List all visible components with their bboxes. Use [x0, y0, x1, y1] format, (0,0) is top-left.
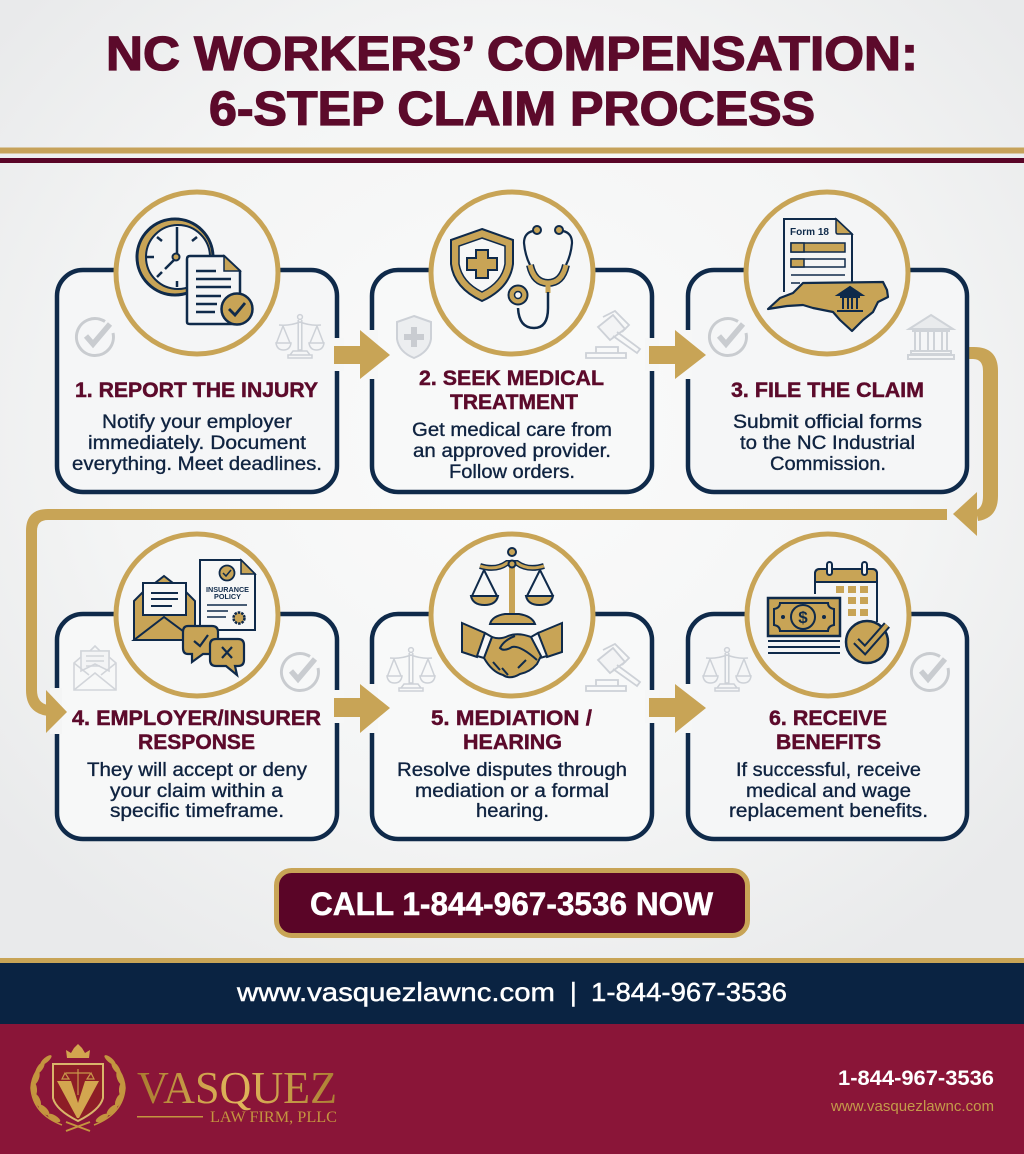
step 4 heading: 4. EMPLOYER/INSURER — [72, 707, 321, 730]
panel: step 5 — [372, 534, 652, 839]
title: 6-STEP CLAIM PROCESS — [209, 83, 815, 136]
connector gap on step 4 card — [50, 688, 62, 734]
navy contact band — [0, 958, 1024, 1024]
step 3 heading: 3. FILE THE CLAIM — [731, 379, 924, 402]
arrow: step 2 to step 3 — [645, 330, 706, 379]
step 6 heading — [769, 707, 887, 754]
connector arrowhead into step 4 — [46, 690, 67, 733]
title — [106, 28, 918, 136]
step 5 description: mediation or a formal — [415, 780, 609, 802]
icon: Form 18 and North Carolina map — [768, 219, 888, 331]
icon: money, calendar and check — [768, 562, 888, 663]
step 3 description: to the NC Industrial — [740, 432, 915, 454]
call to action button: CALL 1-844-967-3536 NOW — [310, 886, 714, 922]
logo: Vasquez Law Firm — [30, 1044, 337, 1131]
icon: envelope, policy and response bubbles: INSURANCE — [206, 587, 249, 594]
navy contact band: | — [570, 977, 577, 1007]
step 1 description: everything. Meet deadlines. — [72, 453, 322, 475]
step 6 description: medical and wage — [746, 780, 911, 802]
step 1 medallion ring — [116, 192, 278, 354]
step 5 faint gavel icon — [586, 644, 640, 691]
icon: envelope, policy and response bubbles: POLICY — [214, 594, 241, 601]
navy contact band: 1-844-967-3536 — [591, 977, 787, 1007]
step 1 description: Notify your employer — [102, 411, 293, 433]
step 3 description — [733, 411, 922, 475]
step 4 description — [87, 759, 307, 822]
step 3 faint check icon — [709, 319, 746, 356]
step 1 description — [72, 411, 322, 475]
step 2 description: Get medical care from — [412, 419, 612, 441]
step 5 description — [397, 759, 627, 822]
logo crown — [66, 1044, 90, 1058]
icon: scales and handshake — [462, 548, 562, 677]
logo subtitle: LAW FIRM, PLLC — [210, 1109, 337, 1126]
step 3 description: Submit official forms — [733, 411, 922, 433]
step 4 heading: RESPONSE — [138, 731, 255, 754]
arrow: step 5 to step 6 — [645, 684, 706, 733]
panel: step 4 — [46, 534, 337, 839]
step 1 description: immediately. Document — [88, 432, 307, 454]
step 1 faint scales icon — [276, 315, 324, 358]
step 4 description: your claim within a — [110, 780, 283, 802]
step 2 heading: TREATMENT — [450, 391, 578, 414]
step 6 medallion ring — [747, 534, 909, 696]
step 4 description: They will accept or deny — [87, 759, 307, 781]
panel: step 2 — [372, 192, 652, 492]
step 5 heading — [431, 707, 592, 754]
step 3 card — [688, 270, 967, 492]
step 1 faint check icon — [76, 319, 113, 356]
navy contact band: www.vasquezlawnc.com — [236, 977, 555, 1007]
icon: shield and stethoscope — [451, 226, 572, 328]
step 4 description: specific timeframe. — [110, 800, 284, 822]
step 1 heading: 1. REPORT THE INJURY — [75, 379, 318, 402]
step 5 card — [372, 614, 652, 839]
step 2 description: Follow orders. — [449, 461, 575, 483]
panel: step 3 — [688, 192, 967, 492]
icon: clock and document — [137, 219, 252, 324]
call to action button — [276, 870, 748, 936]
step 5 faint scales icon — [387, 648, 435, 691]
icon: money, calendar and check: $ — [798, 608, 808, 627]
step 5 heading: HEARING — [463, 731, 562, 754]
step 4 heading — [72, 707, 321, 754]
logo shield — [53, 1064, 103, 1121]
step 3 faint courthouse icon — [908, 315, 954, 359]
icon: envelope, policy and response bubbles — [134, 560, 255, 675]
icon: Form 18 and North Carolina map: Form 18 — [790, 226, 829, 238]
step 2 faint gavel icon — [586, 311, 640, 358]
step 5 description: Resolve disputes through — [397, 759, 627, 781]
step 2 faint shield icon — [397, 316, 431, 358]
step 6 description: If successful, receive — [736, 759, 921, 781]
step 5 description: hearing. — [476, 800, 549, 822]
step 2 description: an approved provider. — [413, 440, 611, 462]
footer phone: 1-844-967-3536 — [838, 1067, 994, 1090]
logo rule — [137, 1116, 203, 1118]
maroon footer band — [0, 1024, 1024, 1154]
arrow: step 4 to step 5 — [330, 684, 390, 733]
step 2 description — [412, 419, 612, 483]
step 4 faint envelope icon — [74, 646, 116, 690]
panel: step 1 — [57, 192, 337, 492]
step 3 description: Commission. — [770, 453, 886, 475]
step 6 card — [688, 614, 967, 839]
step 1 card — [57, 270, 337, 492]
step 6 description — [729, 759, 928, 822]
step 6 faint check icon — [911, 654, 948, 691]
flow connector: step 3 to step 4 — [26, 347, 998, 716]
panel: step 6 — [688, 534, 967, 839]
step 5 heading: 5. MEDIATION / — [431, 707, 592, 730]
step 2 heading — [419, 367, 604, 414]
step 4 card — [57, 614, 337, 839]
step 5 medallion ring — [431, 534, 593, 696]
step 4 medallion ring — [116, 534, 278, 696]
footer website: www.vasquezlawnc.com — [830, 1099, 994, 1115]
step 6 faint scales icon — [703, 648, 751, 691]
arrow: step 1 to step 2 — [330, 330, 390, 379]
step 6 heading: 6. RECEIVE — [769, 707, 887, 730]
step 4 faint check icon — [281, 654, 318, 691]
step 3 medallion ring — [746, 192, 908, 354]
step 6 description: replacement benefits. — [729, 800, 928, 822]
step 2 heading: 2. SEEK MEDICAL — [419, 367, 604, 390]
step 6 heading: BENEFITS — [776, 731, 881, 754]
title divider rules — [0, 148, 1024, 163]
title: NC WORKERS’ COMPENSATION: — [106, 28, 918, 81]
step 2 medallion ring — [431, 192, 593, 354]
logo wordmark: VASQUEZ — [137, 1062, 337, 1113]
logo wreath — [30, 1054, 126, 1131]
step 2 card — [372, 270, 652, 492]
